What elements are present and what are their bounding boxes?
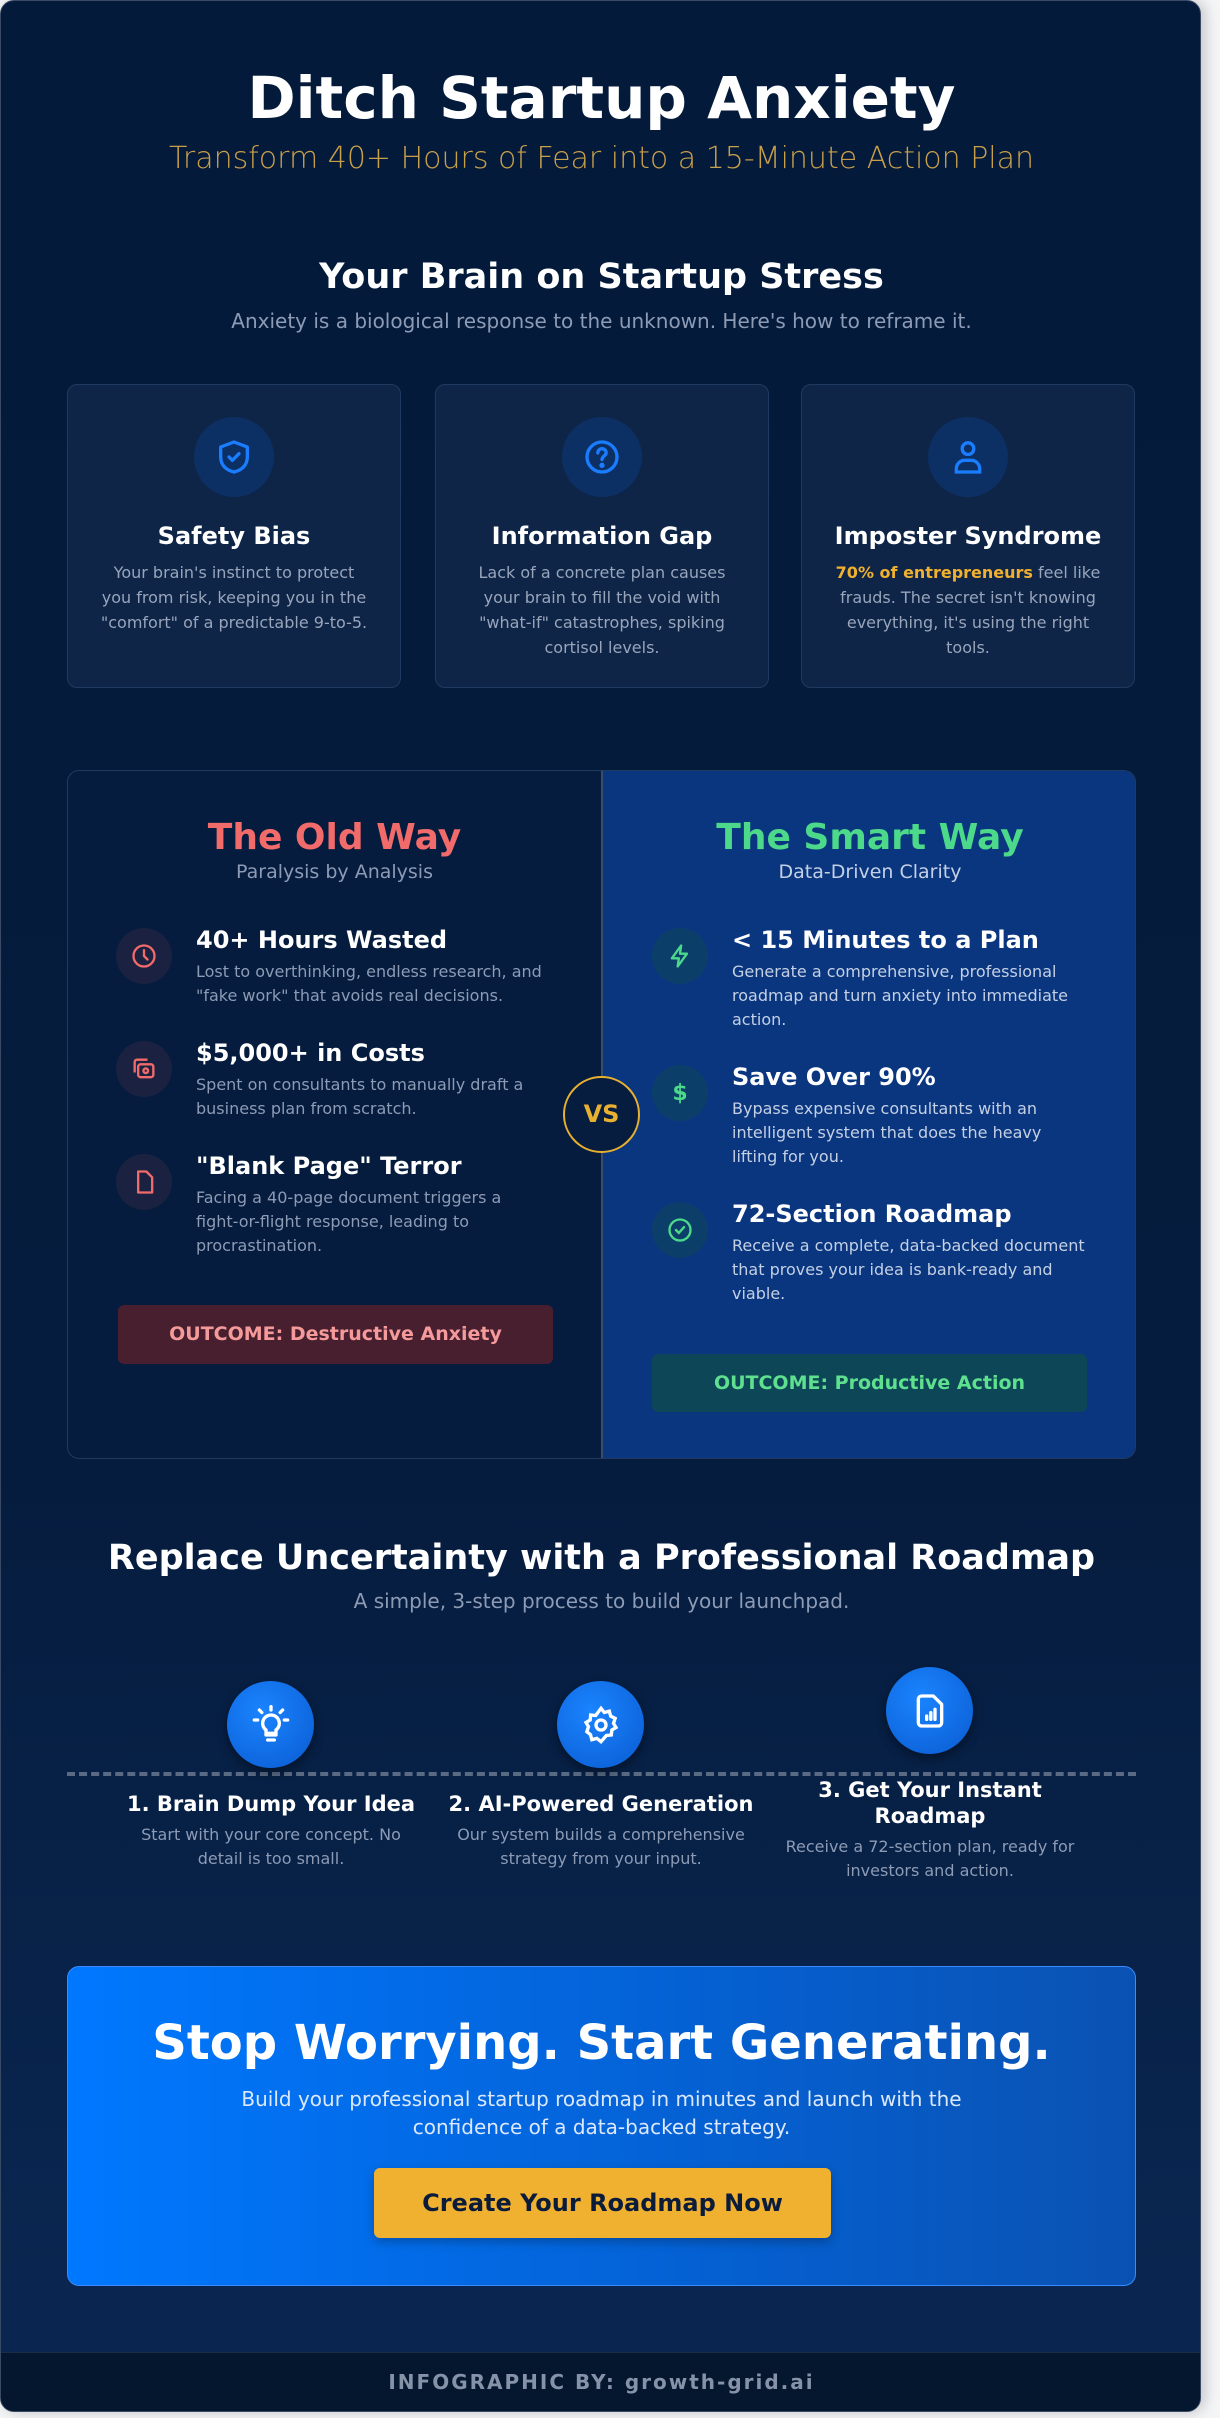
- outcome: productive: [652, 1354, 1087, 1412]
- panel: comparison: Lost to overthinking, endless research, and "fake work" that avoids real decisions.: [196, 962, 542, 1005]
- smart item: minutes: [652, 926, 1068, 1029]
- panel: comparison: "Blank Page" Terror: [196, 1152, 462, 1180]
- dashed timeline: [67, 1772, 1136, 1776]
- cta text: Build your professional startup roadmap in minutes and launch with the confidence of a data-backed strategy.: [241, 2087, 962, 2139]
- icon: dollar: $: [672, 1080, 688, 1106]
- smart way heading: [716, 817, 1024, 883]
- step 1: [127, 1681, 415, 1868]
- panel: safety bias: Your brain's instinct to protect you from risk, keeping you in the "comfort" of a predictable 9-to-5.: [101, 563, 367, 632]
- heading: roadmap: Replace Uncertainty with a Professional Roadmap: [108, 1538, 1095, 1578]
- old way heading: [208, 817, 461, 883]
- smart item: save: [652, 1063, 1041, 1166]
- panel: comparison: 72-Section Roadmap: [732, 1200, 1012, 1228]
- panel: information gap: [435, 384, 769, 688]
- panel: comparison: $5,000+ in Costs: [196, 1039, 425, 1067]
- cta button: Create Your Roadmap Now: [422, 2189, 783, 2217]
- old item: hours: [116, 926, 542, 1005]
- panel: information gap: Information Gap: [492, 522, 712, 550]
- smart way heading: The Smart Way: [716, 817, 1024, 858]
- old way heading: Paralysis by Analysis: [236, 861, 433, 883]
- icon: clock: [116, 928, 172, 984]
- right side background: [601, 771, 1137, 1460]
- subheading: roadmap: A simple, 3-step process to build your launchpad.: [354, 1589, 849, 1613]
- icon: check circle: [652, 1202, 708, 1258]
- icon: money: [116, 1041, 172, 1097]
- step 2: [449, 1681, 753, 1868]
- panel: information gap: Lack of a concrete plan causes your brain to fill the void with "what-if" catastrophes, spiking cortisol levels.: [479, 563, 725, 657]
- cta heading: Stop Worrying. Start Generating.: [152, 2015, 1051, 2071]
- panel: imposter syndrome: [801, 384, 1135, 688]
- outcome: productive: OUTCOME: Productive Action: [714, 1372, 1025, 1394]
- smart item: roadmap: [652, 1200, 1085, 1303]
- panel: comparison: [67, 770, 1136, 1459]
- subtitle: Transform 40+ Hours of Fear into a 15-Minute Action Plan: [169, 141, 1034, 176]
- panel: imposter syndrome: Imposter Syndrome: [835, 522, 1101, 550]
- panel: comparison: Facing a 40-page document triggers a fight-or-flight response, leading to procrastination.: [196, 1188, 501, 1255]
- icon: question: [562, 417, 642, 497]
- old item: costs: [116, 1039, 523, 1118]
- panel: comparison: Spent on consultants to manually draft a business plan from scratch.: [196, 1075, 523, 1118]
- heading: brain on stress: Your Brain on Startup Stress: [319, 257, 884, 297]
- panel: comparison: Bypass expensive consultants with an intelligent system that does the heavy lifting for you.: [732, 1099, 1041, 1166]
- step 1: Start with your core concept. No detail is too small.: [141, 1825, 401, 1868]
- icon: bulb: [227, 1681, 314, 1768]
- step 1: 1. Brain Dump Your Idea: [127, 1792, 415, 1816]
- panel: comparison: 40+ Hours Wasted: [196, 926, 447, 954]
- old way heading: The Old Way: [208, 817, 461, 858]
- panel: safety bias: [67, 384, 401, 688]
- icon: bolt: [652, 928, 708, 984]
- panel: imposter syndrome: 70% of entrepreneurs feel like frauds. The secret isn't knowing everything, it's using the right tools.: [836, 563, 1100, 657]
- panel: safety bias: Safety Bias: [158, 522, 310, 550]
- step 2: 2. AI-Powered Generation: [449, 1792, 753, 1816]
- footer: INFOGRAPHIC BY: growth-grid.ai: [388, 2370, 815, 2394]
- icon: gear: [557, 1681, 644, 1768]
- step 3: 3. Get Your Instant Roadmap: [818, 1778, 1042, 1828]
- outcome: destructive: [118, 1305, 553, 1364]
- step 3: [786, 1667, 1074, 1880]
- smart way heading: Data-Driven Clarity: [779, 861, 961, 883]
- step 3: Receive a 72-section plan, ready for investors and action.: [786, 1837, 1074, 1880]
- subheading: Anxiety is a biological response to the unknown. Here's how to reframe it.: [231, 309, 972, 333]
- panel: comparison: Generate a comprehensive, professional roadmap and turn anxiety into immediate action.: [732, 962, 1068, 1029]
- icon: person: [928, 417, 1008, 497]
- icon: page: [116, 1154, 172, 1210]
- panel: comparison: Receive a complete, data-backed document that proves your idea is bank-ready and viable.: [732, 1236, 1085, 1303]
- vs badge: VS: [584, 1100, 619, 1128]
- panel: call to action: [67, 1966, 1136, 2286]
- icon: shield: [194, 417, 274, 497]
- title: Ditch Startup Anxiety: [248, 64, 955, 132]
- panel: comparison: Save Over 90%: [732, 1063, 936, 1091]
- step 2: Our system builds a comprehensive strategy from your input.: [457, 1825, 745, 1868]
- icon: dollar: [652, 1065, 708, 1121]
- vs badge: [563, 1076, 640, 1153]
- footer: [1, 2352, 1202, 2413]
- old item: blank page: [116, 1152, 501, 1255]
- icon: report: [886, 1667, 973, 1754]
- cta button: [374, 2168, 831, 2238]
- panel: comparison: < 15 Minutes to a Plan: [732, 926, 1039, 954]
- outcome: destructive: OUTCOME: Destructive Anxiety: [169, 1323, 502, 1345]
